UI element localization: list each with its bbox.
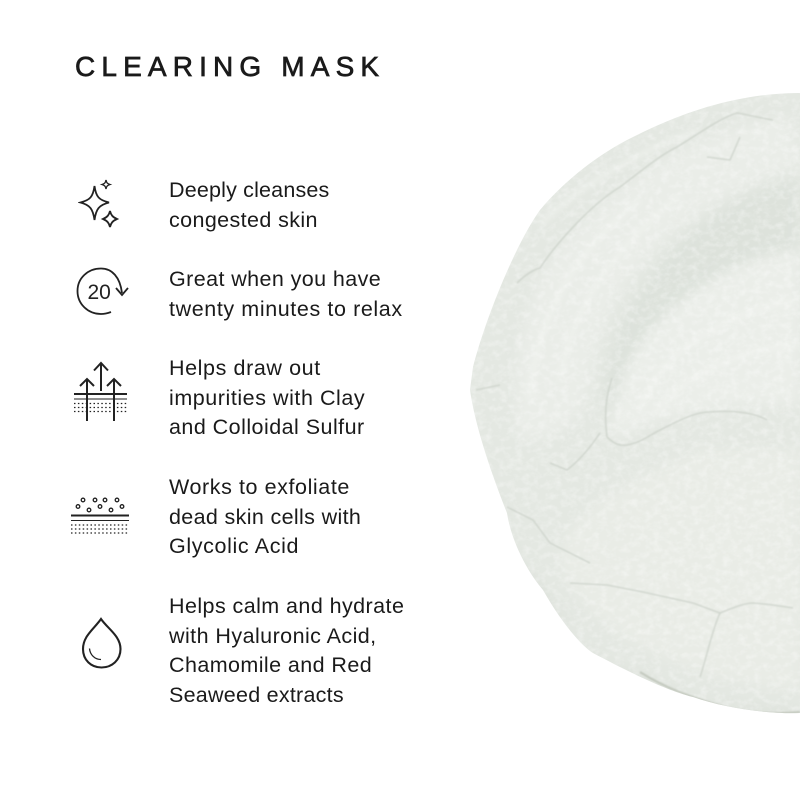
benefit: twenty minutes: twenty minutes to relax: [169, 296, 403, 320]
title: CLEARING MASK: [75, 51, 385, 82]
benefit: exfoliate: Works to exfoliate: [169, 475, 350, 499]
benefit: deep cleanse: Deeply cleanses: [169, 178, 329, 202]
benefit: calm and hydrate: Chamomile and Red: [169, 653, 372, 677]
benefit: deep cleanse: congested skin: [169, 208, 318, 232]
benefit: draw out impurities: impurities with Clay: [169, 386, 365, 410]
icon: arrows drawing out impurities: [74, 362, 127, 421]
benefit: draw out impurities: Helps draw out: [169, 356, 321, 380]
benefit: calm and hydrate: [169, 594, 404, 706]
benefit: deep cleanse: [169, 178, 329, 232]
clay mask swatch: [470, 93, 800, 714]
icon: 20 minute timer: 20: [88, 281, 111, 304]
benefit: exfoliate: Glycolic Acid: [169, 534, 299, 558]
benefit: twenty minutes: Great when you have: [169, 267, 381, 291]
icon: water drop: [82, 617, 122, 668]
benefit: draw out impurities: and Colloidal Sulfur: [169, 415, 365, 439]
benefit: twenty minutes: [169, 267, 403, 320]
benefit: calm and hydrate: Seaweed extracts: [169, 682, 344, 706]
icon: sparkles: [78, 180, 119, 228]
benefit: exfoliate: [169, 475, 361, 558]
benefit: calm and hydrate: with Hyaluronic Acid,: [169, 624, 377, 648]
icon: 20 minute timer: [76, 268, 129, 315]
benefit: draw out impurities: [169, 356, 365, 439]
benefit: calm and hydrate: Helps calm and hydrate: [169, 594, 404, 618]
benefit: exfoliate: dead skin cells with: [169, 504, 361, 528]
icon: exfoliating particles: [71, 498, 129, 534]
